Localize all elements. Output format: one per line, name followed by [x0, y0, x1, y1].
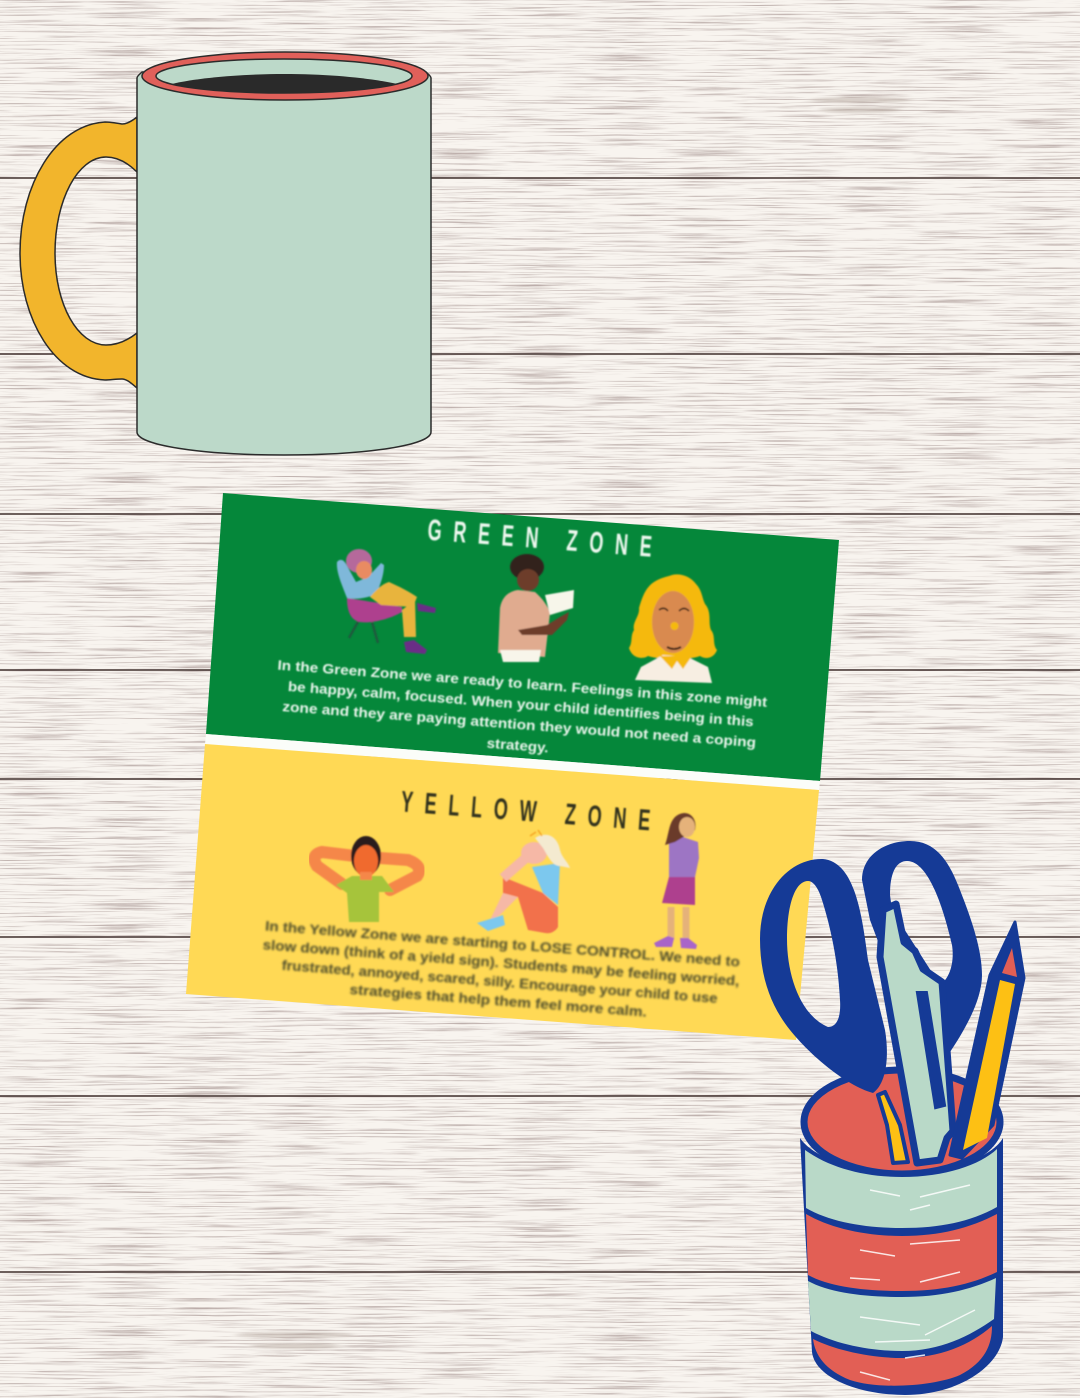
yellow zone paragraph [259, 917, 741, 1027]
green zone paragraph: zone and they are paying attention they would not need a coping [282, 698, 757, 750]
pen [880, 904, 953, 1163]
figure: person reading a book [498, 554, 574, 662]
mug rim [142, 52, 428, 100]
figure: person reclining in chair [337, 549, 436, 654]
green zone heading: GREEN ZONE [426, 514, 653, 564]
yellow zone paragraph: In the Yellow Zone we are starting to LOSE CONTROL. We need to [265, 917, 740, 970]
divider strip [205, 734, 820, 790]
cup back opening [804, 1070, 1000, 1174]
green zone paragraph [272, 657, 768, 772]
figure: stressed person holding head [314, 836, 419, 922]
green zone panel [206, 493, 839, 781]
mug body [137, 72, 431, 455]
yellow zone paragraph: slow down (think of a yield sign). Students may be feeling worried, [262, 936, 740, 989]
mug handle [20, 117, 137, 388]
mug interior [156, 59, 412, 93]
yellow zone heading: YELLOW ZONE [400, 786, 651, 838]
yellow zone paragraph: frustrated, annoyed, scared, silly. Encourage your child to use [281, 957, 718, 1006]
pencil [950, 922, 1024, 1158]
scissors [760, 841, 982, 1093]
zones card [186, 493, 839, 1040]
green zone paragraph: strategy. [486, 735, 549, 755]
coffee mug [20, 52, 431, 455]
green zone paragraph: be happy, calm, focused. When your child identifies being in this [287, 678, 755, 729]
figure: girl with crossed arms [654, 813, 699, 949]
cup front [800, 1138, 1003, 1395]
coffee [172, 74, 397, 93]
yellow pen stub [878, 1092, 908, 1163]
yellow zone paragraph: strategies that help them feel more calm. [349, 981, 647, 1020]
figure: upset seated girl [477, 830, 570, 933]
yellow zone panel [186, 744, 819, 1040]
green zone paragraph: In the Green Zone we are ready to learn. Feelings in this zone might [277, 657, 768, 710]
pencil cup [760, 841, 1024, 1395]
figure: smiling woman with yellow hair [629, 574, 717, 683]
